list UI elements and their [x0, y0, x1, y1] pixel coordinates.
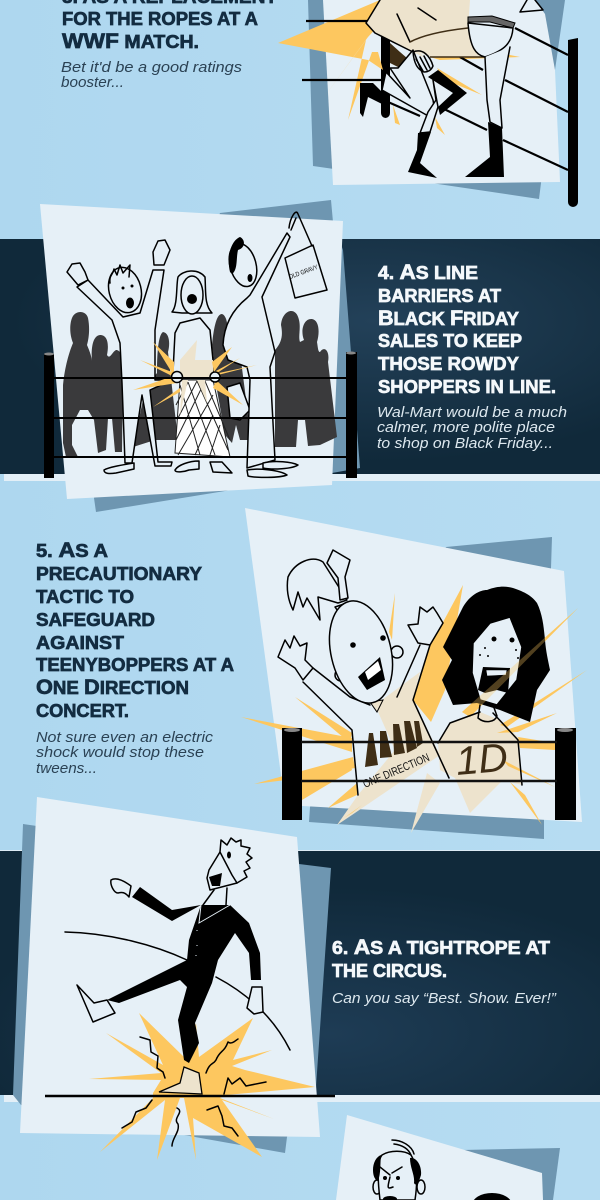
heading: item 3 [62, 0, 277, 53]
ring post: right [568, 38, 578, 207]
opponent: far leg [420, 80, 438, 133]
crowd silhouettes: centre [133, 314, 251, 447]
wrestler: thigh [410, 28, 490, 57]
girl left: chin [370, 700, 383, 712]
heading: item 5 [36, 539, 234, 721]
face [122, 284, 134, 308]
hair [110, 265, 130, 283]
man: hair [220, 838, 252, 883]
head [104, 264, 146, 316]
electric burst [133, 342, 257, 407]
man: side hair [373, 1155, 421, 1184]
girl right: mouth [478, 667, 510, 693]
shopper: left man [67, 240, 172, 474]
caption: item 4 [377, 405, 567, 452]
ring post: back [381, 0, 390, 118]
caption: item 6: Can you say “Best. Show. Ever!” [332, 991, 557, 1007]
mouth [248, 274, 252, 282]
wrestler: thigh outline [410, 28, 490, 57]
girl left: arms and body [303, 645, 449, 795]
heading: item 6: 6. AS A TIGHTROPE AT [332, 936, 550, 959]
girl left: hand right [408, 607, 443, 645]
burst centre [180, 340, 213, 415]
caption: item 5 [36, 730, 214, 777]
heading: item 5: ONE DIRECTION [36, 676, 189, 699]
dark band: item 6 [0, 850, 600, 1102]
wrestler: hand [413, 51, 433, 72]
man: black suit [107, 887, 261, 1063]
girl left: eyes [350, 635, 386, 648]
panel: wrestling illustration [278, 0, 578, 207]
card [323, 0, 560, 185]
beige rays [337, 672, 522, 833]
text block: item 5 [36, 539, 234, 777]
heading: item 6: THE CIRCUS. [332, 961, 447, 981]
man: neck [203, 888, 227, 905]
bag [285, 245, 327, 298]
hair [229, 237, 244, 274]
girl right: hair [442, 587, 550, 722]
card shadow [94, 200, 360, 512]
panel: One Direction illustration [241, 508, 587, 839]
opponent: near leg [485, 47, 510, 128]
opponent: belt [468, 16, 515, 28]
girl right: eyes and freckles [479, 636, 519, 659]
crowd silhouettes: left [63, 312, 123, 457]
heading: item 6 [332, 936, 550, 981]
card [20, 797, 320, 1137]
bag handle [289, 212, 312, 246]
tightrope [45, 1095, 335, 1097]
card shadow [308, 0, 565, 199]
shirt silhouettes [365, 721, 423, 767]
man: foot [159, 1067, 202, 1094]
panel: next item illustration [336, 1115, 560, 1200]
ring posts [44, 352, 357, 478]
wrestler: lower leg [382, 50, 435, 117]
mouth [187, 294, 197, 304]
front ropes [388, 28, 568, 170]
shoes [247, 462, 298, 477]
man: face [380, 1167, 402, 1200]
crowd silhouettes: right [275, 311, 337, 447]
girl left: mouth [358, 657, 385, 690]
man: eye [227, 852, 231, 858]
card [40, 204, 343, 499]
wrestler: torso [366, 0, 470, 58]
opponent: boot right [465, 122, 504, 177]
girl right: braces [486, 670, 507, 676]
body and trousers [77, 270, 172, 466]
man: white shoe [77, 985, 115, 1022]
balance pole [65, 932, 290, 1050]
man: head [207, 852, 237, 890]
shoes [175, 461, 232, 473]
face [181, 276, 203, 314]
girl left: teeth [365, 661, 381, 680]
opponent: trunks [468, 23, 513, 57]
net skirt [175, 380, 230, 457]
girl left: scrunchie [335, 602, 350, 617]
man: lower hand [247, 987, 263, 1014]
heading: item 4: 4. AS LINE [378, 261, 478, 284]
electric burst [278, 0, 520, 135]
card [336, 1115, 543, 1200]
back ropes [302, 21, 388, 80]
bag label: OLD GRAVY [288, 264, 319, 281]
caption: item 3: Bet it'd be a good ratings [61, 60, 242, 76]
opponent: shirt [520, 0, 543, 12]
caption: item 5: Not sure even an electric [36, 730, 214, 746]
crossing ray [462, 608, 578, 717]
panel: Black Friday illustration [40, 200, 360, 512]
caption: item 3 [61, 60, 242, 91]
dark band: item 4 [0, 239, 600, 481]
card [245, 508, 582, 822]
heading: item 5: PRECAUTIONARY [36, 564, 202, 584]
heading: item 5: TACTIC TO [36, 587, 134, 607]
body [173, 318, 214, 380]
man: raised hand [111, 879, 131, 897]
shopper: right man [223, 212, 327, 477]
woman's hands [172, 372, 220, 382]
ring ropes [301, 742, 557, 781]
text block: item 6 [332, 936, 557, 1007]
caption: item 4: to shop on Black Friday... [377, 436, 553, 452]
heading: item 4 [378, 261, 556, 397]
heading: item 4: SALES TO KEEP [378, 331, 522, 351]
wrestler: arm outline [366, 0, 436, 52]
caption: item 4: calmer, more polite place [377, 420, 555, 436]
raised fists [67, 240, 170, 285]
girl right: neck and body [438, 705, 522, 785]
man: flyaway hair [392, 1140, 414, 1155]
card shadow [13, 824, 331, 1153]
girl left: ponytail [287, 559, 347, 620]
girl right: face [472, 617, 522, 705]
ring posts [282, 728, 576, 820]
shoe [104, 463, 134, 474]
caption: item 5: tweens... [36, 761, 97, 777]
panel: tightrope illustration [13, 797, 335, 1160]
heading: item 3: WWF MATCH. [62, 30, 199, 53]
card shadow [309, 537, 552, 839]
second figure: hair [472, 1193, 512, 1200]
heading: item 4: THOSE ROWDY [378, 354, 519, 374]
caption: item 5: shock would stop these [36, 745, 204, 761]
heading: item 5: CONCERT. [36, 701, 129, 721]
electric burst [89, 1013, 315, 1160]
man: ears [373, 1180, 425, 1194]
heading: item 5: SAFEGUARD [36, 610, 155, 630]
sparks [122, 1037, 266, 1146]
head [225, 240, 261, 290]
card shadow [462, 1148, 560, 1200]
ring ropes [52, 378, 348, 457]
girl left: tuft [327, 550, 350, 600]
text block: item 3 [61, 0, 277, 91]
caption: item 3: booster... [61, 75, 124, 91]
shirt logo: 1D [454, 736, 510, 784]
caption: item 4: Wal-Mart would be a much [377, 405, 567, 421]
man: collar [196, 905, 230, 956]
purse [227, 383, 250, 420]
wrestler: raised boot [428, 70, 467, 115]
opponent: boot left [408, 132, 437, 178]
girl left: head [320, 595, 402, 709]
heading: item 5: 5. AS A [36, 539, 108, 562]
text block: item 4 [377, 261, 567, 452]
man: head [378, 1151, 417, 1200]
heading: item 3: FOR THE ROPES AT A [62, 9, 258, 29]
hair [172, 271, 212, 313]
body and trousers [223, 233, 290, 468]
wrestler: brown shorts [390, 43, 415, 68]
girl left: ears [335, 646, 403, 681]
electric burst [241, 585, 587, 825]
heading: item 5: TEENYBOPPERS AT A [36, 655, 234, 675]
man: mouth [209, 873, 222, 886]
wrestler: back boot [360, 83, 388, 117]
girl left: hand left [278, 636, 313, 680]
heading: item 4: BARRIERS AT [378, 286, 501, 306]
shirt text: ONE DIRECTION [361, 752, 432, 791]
shopper: woman [172, 271, 232, 473]
heading: item 4: SHOPPERS IN LINE. [378, 377, 556, 397]
heading: item 4: BLACK FRIDAY [378, 307, 519, 330]
heading: item 5: AGAINST [36, 633, 124, 653]
